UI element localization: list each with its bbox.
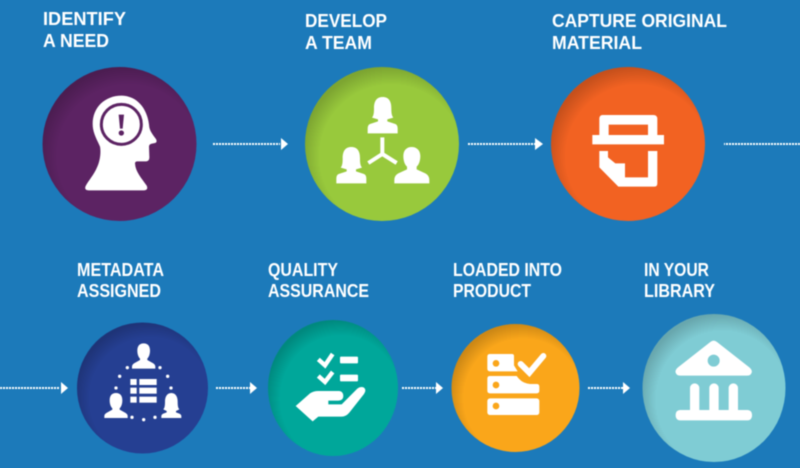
arrow: identify to team bbox=[213, 138, 288, 150]
arrow: capture continues off the edge bbox=[724, 143, 800, 145]
step: loaded into product bbox=[452, 260, 580, 452]
heading: loaded into product bbox=[453, 260, 562, 301]
heading: capture original material: MATERIAL bbox=[552, 33, 642, 53]
icon: server stack with check bbox=[487, 354, 543, 415]
step: metadata assigned bbox=[77, 260, 208, 454]
icon: three connected people bbox=[336, 97, 429, 183]
heading: loaded into product: LOADED INTO bbox=[453, 260, 562, 280]
arrow: loaded to library bbox=[588, 382, 630, 394]
heading: in your library: IN YOUR bbox=[644, 260, 709, 280]
icon: library building bbox=[675, 341, 752, 420]
circle: green bbox=[305, 67, 459, 221]
heading: loaded into product: PRODUCT bbox=[453, 281, 531, 301]
circle: teal bbox=[268, 320, 398, 456]
step: identify a need bbox=[42, 9, 196, 221]
icon: scanner bbox=[592, 115, 664, 187]
circle: light teal bbox=[642, 314, 786, 462]
heading: quality assurance bbox=[268, 260, 369, 301]
circle: amber bbox=[452, 324, 580, 452]
heading: identify a need: IDENTIFY bbox=[43, 9, 126, 29]
heading: identify a need bbox=[43, 9, 126, 51]
heading: quality assurance: ASSURANCE bbox=[268, 281, 369, 301]
icon: head with exclamation bbox=[85, 96, 157, 190]
icon: people around a list bbox=[104, 343, 181, 421]
step: in your library bbox=[642, 260, 786, 462]
heading: develop a team bbox=[305, 11, 387, 53]
heading: capture original material bbox=[552, 11, 727, 53]
heading: in your library: LIBRARY bbox=[644, 281, 715, 301]
circle: navy bbox=[77, 322, 208, 454]
heading: identify a need: A NEED bbox=[43, 31, 109, 51]
heading: develop a team: A TEAM bbox=[305, 33, 372, 53]
step: capture original material bbox=[551, 11, 727, 221]
circle: orange bbox=[551, 67, 705, 221]
heading: metadata assigned: ASSIGNED bbox=[77, 281, 161, 301]
heading: capture original material: CAPTURE ORIGINAL bbox=[552, 11, 727, 31]
heading: metadata assigned: METADATA bbox=[77, 260, 164, 280]
heading: quality assurance: QUALITY bbox=[268, 260, 338, 280]
circle: purple bbox=[42, 67, 196, 221]
heading: metadata assigned bbox=[77, 260, 164, 301]
arrow: team to capture bbox=[468, 138, 543, 150]
step: quality assurance bbox=[268, 260, 398, 456]
arrow: metadata to quality bbox=[215, 382, 257, 394]
arrow: into metadata bbox=[0, 382, 68, 394]
arrow: quality to loaded bbox=[401, 382, 443, 394]
step: develop a team bbox=[305, 11, 459, 221]
heading: develop a team: DEVELOP bbox=[305, 11, 387, 31]
heading: in your library bbox=[644, 260, 715, 301]
icon: hand holding checklist bbox=[296, 354, 365, 421]
